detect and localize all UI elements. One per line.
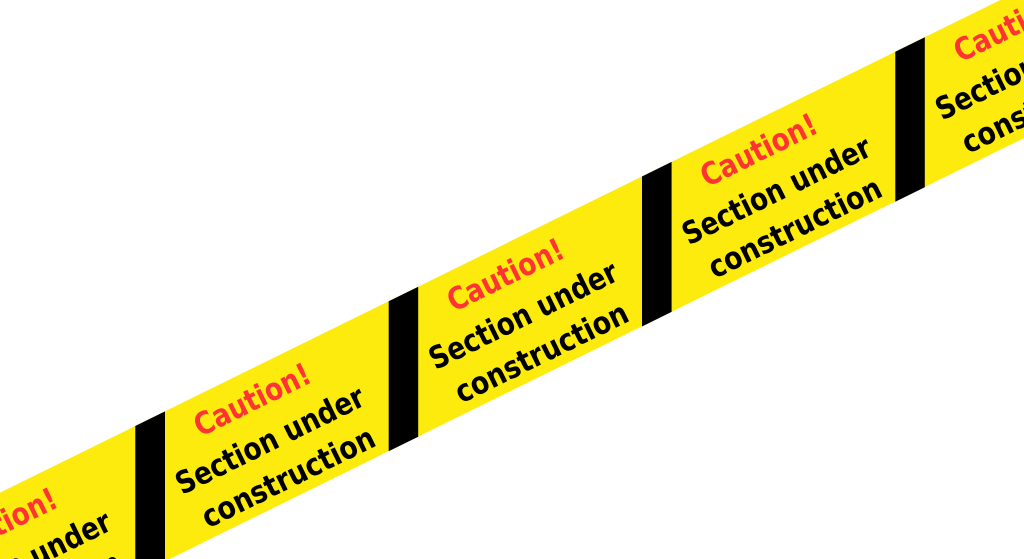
tape label 4: Section under (676, 129, 878, 253)
tape label 4 (657, 90, 896, 290)
tape label 2: Caution! (188, 356, 317, 444)
tape label 5 (910, 0, 1024, 165)
tape label 3: construction (449, 295, 635, 411)
black stripe 3 (642, 162, 672, 326)
tape label 3: Section under (423, 254, 624, 377)
tape label 3: Caution! (441, 232, 570, 319)
tape label 2 (150, 339, 389, 540)
tape label 3 (404, 214, 643, 415)
black stripe 1 (135, 411, 165, 559)
black stripe 4 (895, 37, 925, 202)
tape label 1 (0, 464, 136, 559)
tape label 2: construction (196, 420, 381, 536)
tape label 4: Caution! (695, 107, 824, 195)
black stripe 2 (389, 287, 418, 451)
tape label 2: Section under (170, 379, 371, 502)
tape label 4: construction (702, 170, 888, 286)
